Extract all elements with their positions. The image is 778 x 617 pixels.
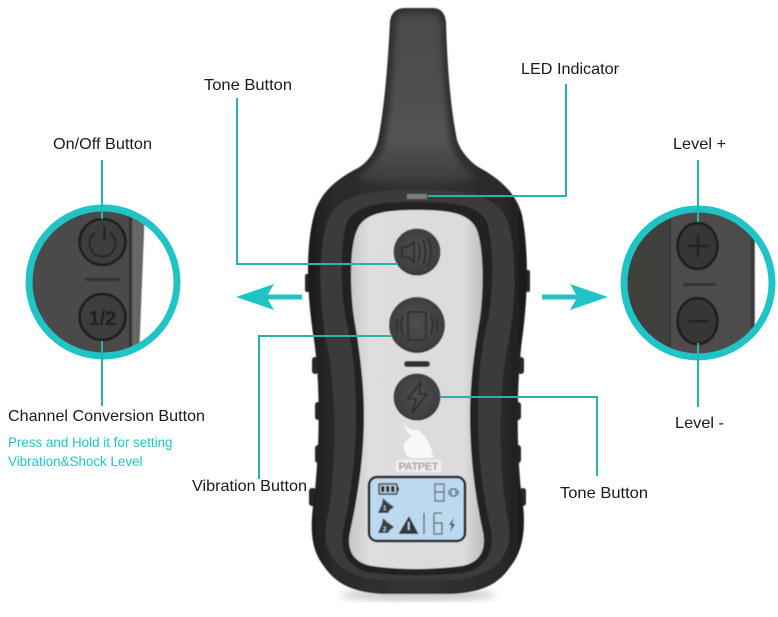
label: level minus: Level -: [675, 415, 724, 432]
PATPET logo: PATPET: [398, 461, 439, 473]
inner frame: [320, 190, 515, 580]
tone button: [394, 228, 440, 276]
left zoom circle: on/off and channel buttons: [29, 208, 177, 358]
label: channel conversion button: Channel Conversion Button: [8, 408, 205, 425]
label: shock tone button: Tone Button: [560, 485, 648, 502]
divider lozenge: [404, 361, 430, 367]
grey face panel: [349, 210, 484, 569]
note: press and hold: Press and Hold it for setting: [8, 435, 172, 450]
channel button: [80, 294, 126, 340]
plus button: [678, 223, 718, 269]
antenna highlight: [358, 14, 476, 184]
shock button: [394, 374, 440, 420]
connector: channel conversion: [101, 341, 103, 406]
digit 8: [435, 484, 444, 501]
label: vibration button: Vibration Button: [192, 478, 307, 495]
arrow: left: [236, 284, 302, 310]
LCD screen: [369, 477, 465, 541]
LED indicator: [407, 194, 427, 199]
device body: [308, 8, 527, 594]
battery icon: [379, 484, 399, 494]
note: press and hold: [8, 435, 172, 469]
device shadow: [340, 589, 496, 601]
digits 16: [424, 513, 442, 534]
label: level plus: Level +: [673, 136, 726, 153]
minus button: [678, 298, 718, 344]
power button: [80, 219, 126, 265]
channel button: 1/2: [89, 308, 116, 330]
divider mark: [85, 278, 120, 281]
dog channel 1 icon: 1: [383, 506, 387, 512]
arrow: right: [542, 284, 608, 310]
side grip bumps: [305, 270, 530, 506]
note: press and hold: Vibration&Shock Level: [8, 454, 143, 469]
vibration glyph: [449, 489, 458, 496]
connector: level minus: [697, 343, 699, 407]
bolt glyph: [449, 518, 455, 532]
connector: LED indicator: [428, 84, 566, 196]
connector: vibration button: [259, 336, 392, 479]
warning triangle: [398, 516, 418, 534]
divider mark: [683, 283, 716, 286]
label: on/off button: On/Off Button: [53, 136, 152, 153]
vibration button: [389, 297, 445, 353]
inner frame shadow band: [342, 202, 492, 575]
dog channel 2 icon: 2: [383, 527, 387, 533]
PATPET logo: [396, 424, 441, 473]
label: LED indicator: LED Indicator: [521, 61, 620, 78]
connector: shock tone button: [440, 397, 597, 476]
panel: remote controller device: [305, 8, 530, 601]
label: tone button: Tone Button: [204, 77, 292, 94]
connector: level plus: [697, 160, 699, 222]
connector: tone button: [237, 98, 398, 264]
right zoom circle: level buttons: [621, 206, 775, 360]
connector: on/off button: [101, 160, 103, 219]
